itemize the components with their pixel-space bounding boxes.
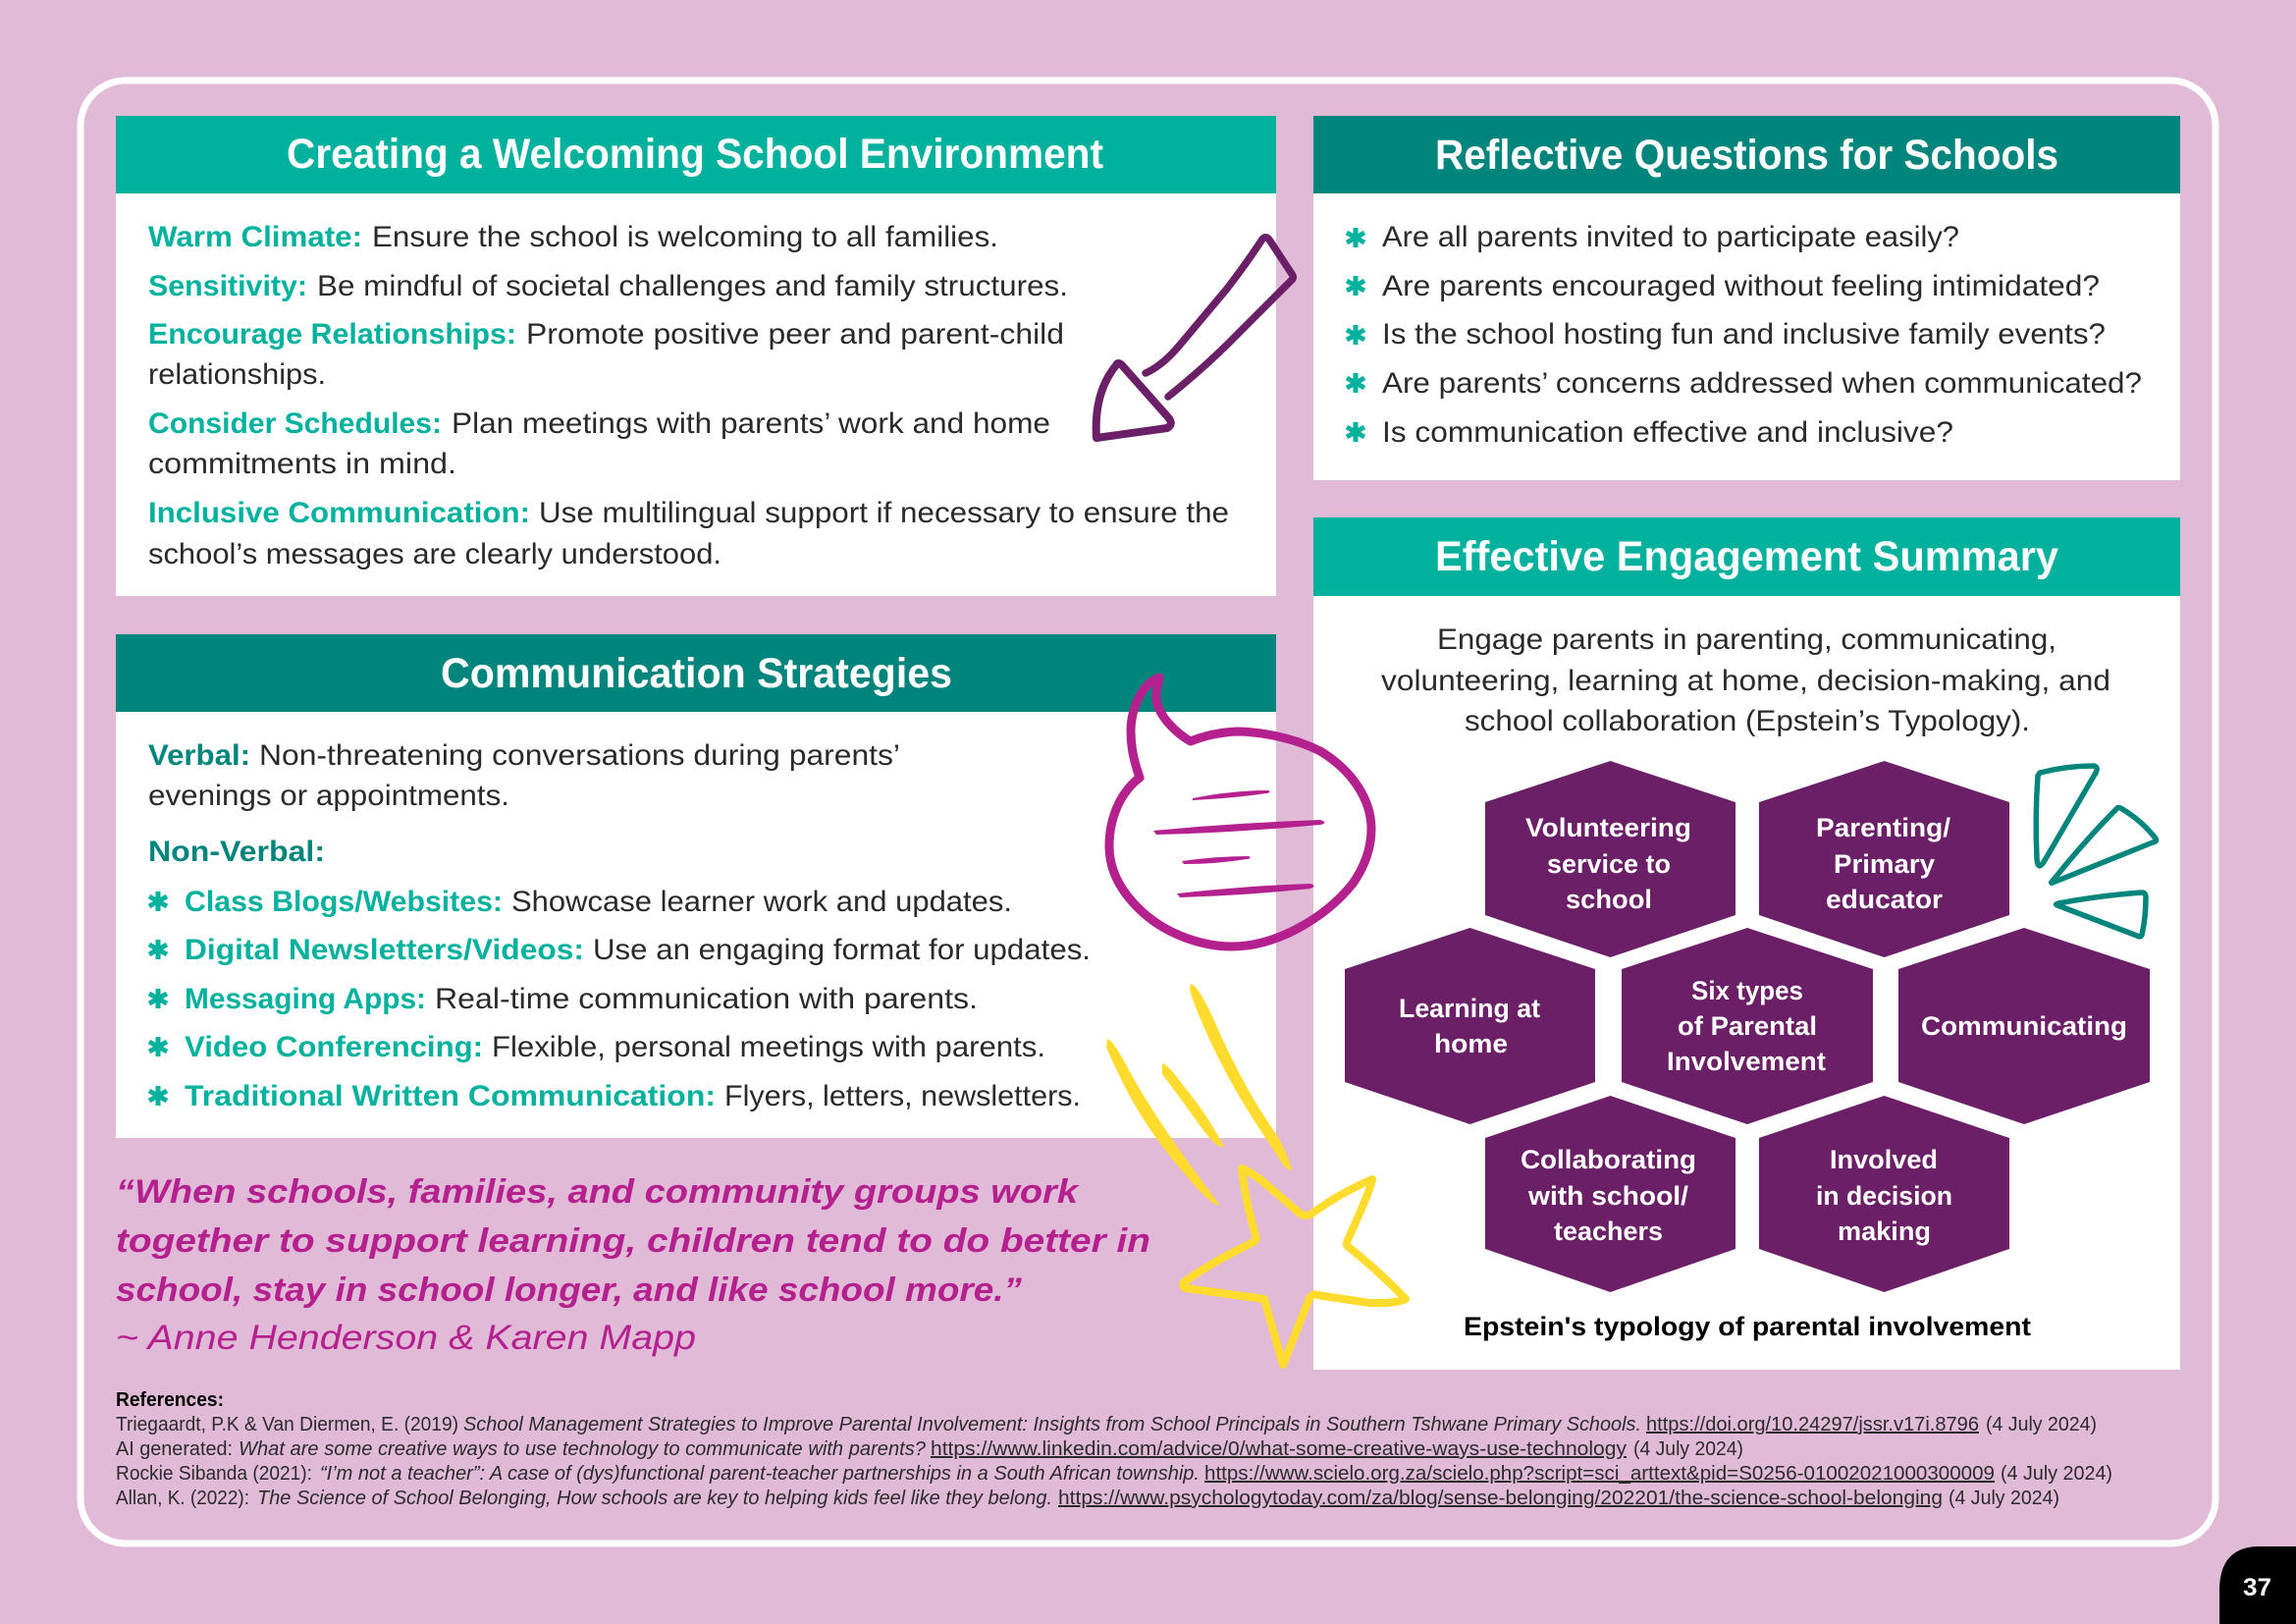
list: non-verbal strategies: Real-time communication with parents. xyxy=(435,983,978,1015)
icon: purple hand-drawn arrow xyxy=(1096,238,1293,438)
text: summary intro: volunteering, learning at home, decision-making, and xyxy=(1381,665,2110,697)
text: inclusive communication: Use multilingual support if necessary to ensure the xyxy=(539,497,1229,529)
list: reflective questions: Is communication effective and inclusive? xyxy=(1382,416,1953,449)
references: Allan, K. (2022): xyxy=(116,1488,249,1509)
heading: creating a welcoming school environment: Creating a Welcoming School Environment xyxy=(287,131,1103,178)
text: summary intro: Engage parents in parenting, communicating, xyxy=(1437,623,2056,656)
text: summary intro: school collaboration (Epstein’s Typology). xyxy=(1465,705,2030,737)
heading: creating a welcoming school environment xyxy=(116,116,1276,193)
heading: effective engagement summary xyxy=(1313,517,2180,596)
hexagon: learning at home: home xyxy=(1434,1029,1508,1058)
hexagon: parenting xyxy=(1759,761,2009,957)
list: reflective questions: Are parents encouraged without feeling intimidated? xyxy=(1382,270,2100,302)
references: The Science of School Belonging, How schools are key to helping kids feel like they belong. xyxy=(257,1488,1052,1509)
quote: “When schools, families, and community groups work xyxy=(116,1173,1080,1211)
text: verbal: Verbal: xyxy=(148,739,250,772)
references: https://doi.org/10.24297/jssr.v17i.8796 xyxy=(1646,1414,1979,1435)
list: non-verbal strategies: Flexible, personal meetings with parents. xyxy=(492,1031,1045,1063)
list: non-verbal strategies: Digital Newsletters/Videos: xyxy=(185,934,584,966)
motion dashes xyxy=(1106,984,1292,1206)
hexagon: collaborating xyxy=(1485,1096,1735,1292)
references xyxy=(116,1389,2112,1509)
hexagon: communicating: Communicating xyxy=(1921,1011,2127,1041)
list: reflective questions: Are parents’ concerns addressed when communicated? xyxy=(1382,367,2142,400)
heading: reflective questions for schools xyxy=(1313,116,2180,193)
text: verbal xyxy=(148,739,900,812)
quote: school, stay in school longer, and like school more.” xyxy=(116,1272,1022,1309)
hexagon: parenting: educator xyxy=(1826,885,1944,914)
hexagon: learning at home xyxy=(1345,928,1595,1124)
hexagon: parenting: Primary xyxy=(1834,849,1935,879)
list: reflective questions: Is the school hosting fun and inclusive family events? xyxy=(1382,318,2106,351)
text: non-verbal label: Non-Verbal: xyxy=(148,836,325,868)
text: consider schedules: Consider Schedules: xyxy=(148,407,442,440)
text: encourage relationships: relationships. xyxy=(148,358,326,391)
list: reflective questions xyxy=(1347,221,2142,449)
references: AI generated: xyxy=(116,1438,233,1460)
references: https://www.scielo.org.za/scielo.php?script=sci_arttext&pid=S0256-01002021000300009 xyxy=(1204,1463,1995,1485)
hexagon: collaborating: teachers xyxy=(1554,1217,1663,1246)
list: non-verbal strategies: Showcase learner work and updates. xyxy=(511,886,1012,918)
text: sensitivity: Be mindful of societal challenges and family structures. xyxy=(317,270,1068,302)
quote: together to support learning, children tend to do better in xyxy=(116,1222,1150,1260)
list: non-verbal strategies: Use an engaging format for updates. xyxy=(593,934,1091,966)
references: Rockie Sibanda (2021): xyxy=(116,1463,312,1485)
list: non-verbal strategies: Video Conferencing: xyxy=(185,1031,483,1063)
hexagon: parenting: Parenting/ xyxy=(1816,813,1951,842)
list: non-verbal strategies: Class Blogs/Websites: xyxy=(185,886,503,918)
references: What are some creative ways to use technology to communicate with parents? xyxy=(239,1438,927,1460)
text: summary intro xyxy=(1381,623,2110,737)
panel: reflective questions for schools xyxy=(1313,116,2180,480)
text: encourage relationships: Promote positive peer and parent-child xyxy=(526,318,1064,351)
list: non-verbal strategies: Messaging Apps: xyxy=(185,983,426,1015)
references: “I’m not a teacher”: A case of (dys)functional parent-teacher partnerships in a South African township. xyxy=(320,1463,1200,1485)
hexagon diagram: six types of parental involvement xyxy=(1345,761,2150,1292)
hexagon: six types centre: Involvement xyxy=(1667,1047,1826,1076)
text: consider schedules xyxy=(148,407,1050,480)
list: non-verbal strategies xyxy=(149,886,1091,1112)
list: non-verbal strategies: Flyers, letters, newsletters. xyxy=(724,1080,1081,1112)
speech lines xyxy=(1153,790,1325,897)
hexagon: decision making: making xyxy=(1838,1217,1931,1246)
heading: effective engagement summary: Effective Engagement Summary xyxy=(1435,533,2058,580)
hexagon: collaborating: with school/ xyxy=(1527,1181,1689,1211)
text: inclusive communication: school’s messages are clearly understood. xyxy=(148,538,721,570)
caption: epstein's typology: Epstein's typology of parental involvement xyxy=(1464,1312,2031,1341)
page number tab: 37 xyxy=(2243,1574,2271,1601)
hexagon: six types centre: Six types xyxy=(1691,976,1803,1005)
heading: communication strategies xyxy=(116,634,1276,712)
hexagon: decision making: in decision xyxy=(1816,1181,1952,1211)
page number tab xyxy=(2219,1546,2296,1624)
text: consider schedules: Plan meetings with parents’ work and home xyxy=(452,407,1050,440)
hexagon: decision making xyxy=(1759,1096,2009,1292)
hexagon: decision making: Involved xyxy=(1830,1145,1938,1174)
references: (4 July 2024) xyxy=(2001,1463,2112,1485)
text: sensitivity: Sensitivity: xyxy=(148,270,307,302)
quote: ~ Anne Henderson & Karen Mapp xyxy=(116,1319,696,1357)
hexagon: volunteering: school xyxy=(1566,885,1652,914)
heading: reflective questions for schools: Reflective Questions for Schools xyxy=(1435,132,2058,179)
text: warm climate: Ensure the school is welcoming to all families. xyxy=(372,221,998,253)
references: (4 July 2024) xyxy=(1633,1438,1743,1460)
hexagon: six types centre xyxy=(1622,928,1873,1124)
hexagon: volunteering xyxy=(1485,761,1735,957)
text: inclusive communication xyxy=(148,497,1229,570)
panel: effective engagement summary xyxy=(1313,517,2180,1370)
quote xyxy=(116,1173,1150,1357)
references: References: xyxy=(116,1389,224,1411)
hexagon: learning at home: Learning at xyxy=(1399,994,1540,1023)
icon: teal triangle burst xyxy=(2036,766,2157,937)
references: (4 July 2024) xyxy=(1949,1488,2059,1509)
text: consider schedules: commitments in mind. xyxy=(148,448,456,480)
text: verbal: evenings or appointments. xyxy=(148,780,509,812)
references: https://www.linkedin.com/advice/0/what-some-creative-ways-use-technology xyxy=(931,1438,1627,1460)
list: reflective questions: Are all parents invited to participate easily? xyxy=(1382,221,1959,253)
icon: magenta speech bubble xyxy=(1109,677,1371,947)
references: (4 July 2024) xyxy=(1986,1414,2097,1435)
icon: yellow star with motion dashes xyxy=(1106,984,1406,1365)
references: https://www.psychologytoday.com/za/blog/sense-belonging/202201/the-science-school-belonging xyxy=(1058,1488,1943,1509)
hexagon: volunteering: Volunteering xyxy=(1525,813,1691,842)
text: verbal: Non-threatening conversations during parents’ xyxy=(259,739,900,772)
list: non-verbal strategies: Traditional Written Communication: xyxy=(185,1080,716,1112)
references: Triegaardt, P.K & Van Diermen, E. (2019) xyxy=(116,1414,458,1435)
text: warm climate: Warm Climate: xyxy=(148,221,362,253)
text: encourage relationships xyxy=(148,318,1064,391)
hexagon: volunteering: service to xyxy=(1547,849,1671,879)
hexagon: collaborating: Collaborating xyxy=(1521,1145,1696,1174)
text: encourage relationships: Encourage Relationships: xyxy=(148,318,516,351)
heading: communication strategies: Communication Strategies xyxy=(441,650,952,697)
panel: communication strategies xyxy=(116,634,1276,1138)
references: School Management Strategies to Improve Parental Involvement: Insights from School Principals in Southern Tshwane Primary Schools. xyxy=(463,1414,1641,1435)
hexagon: six types centre: of Parental xyxy=(1678,1011,1817,1041)
text: inclusive communication: Inclusive Communication: xyxy=(148,497,530,529)
panel: creating a welcoming school environment xyxy=(116,116,1276,596)
hexagon: communicating xyxy=(1898,928,2150,1124)
